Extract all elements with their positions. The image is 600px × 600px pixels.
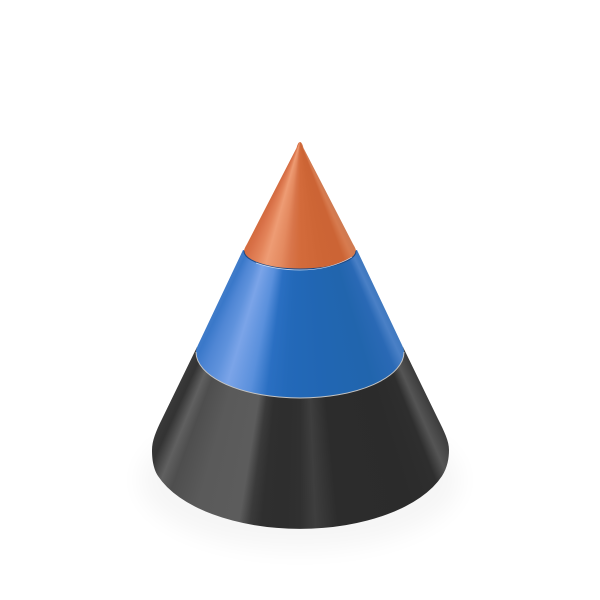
ground shadow <box>140 410 460 550</box>
seam: blue and black <box>196 352 404 398</box>
bottom layer: black <box>152 347 449 529</box>
illustration: three-layer cone <box>152 142 449 535</box>
middle layer: blue <box>196 250 404 398</box>
seam: orange and blue, dark <box>244 251 356 269</box>
top layer: orange <box>244 142 356 268</box>
seam: orange and blue, light <box>256 257 352 270</box>
